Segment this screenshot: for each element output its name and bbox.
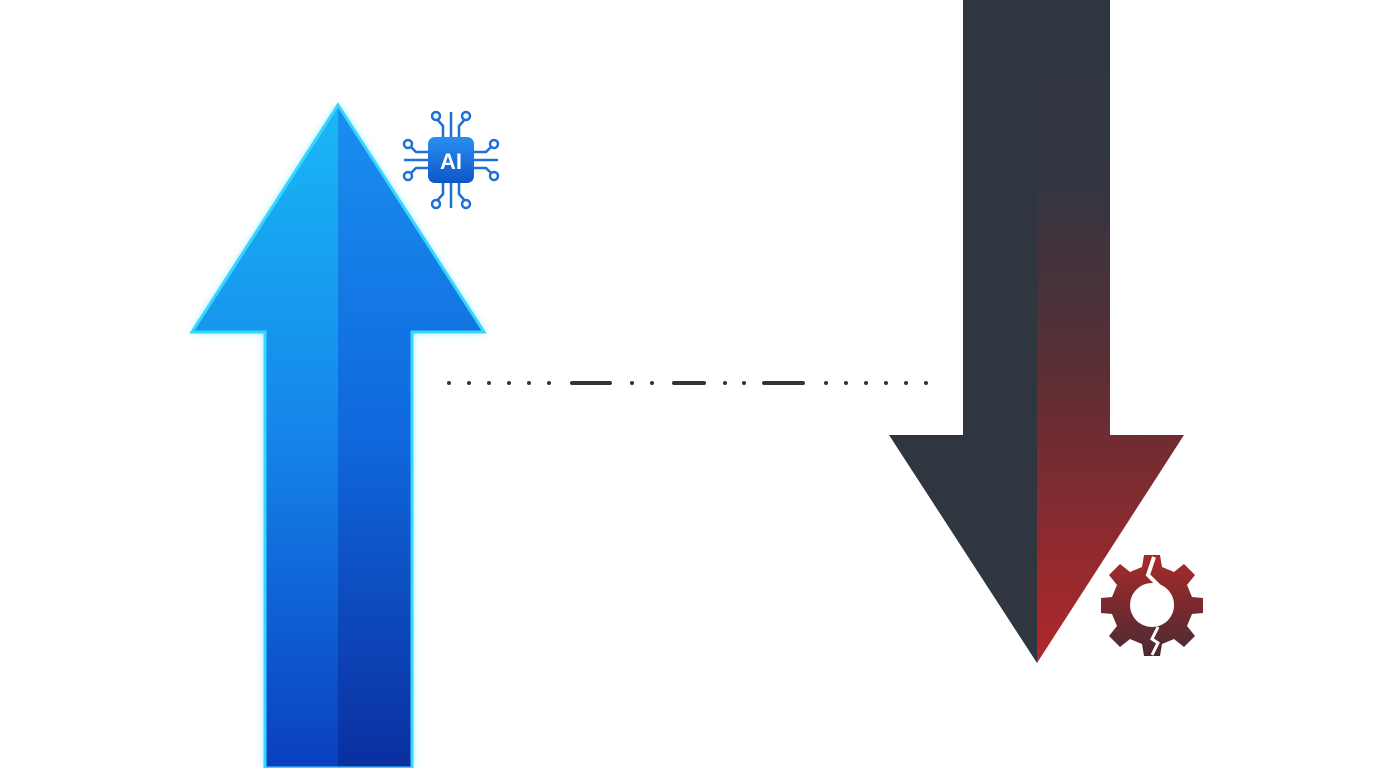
icon: AI chip: AI [440, 149, 462, 174]
up arrow [192, 105, 484, 768]
icon: AI chip [404, 112, 498, 208]
icon: broken gear [1101, 555, 1203, 656]
dotted connector [447, 381, 928, 385]
down arrow [889, 0, 1184, 663]
